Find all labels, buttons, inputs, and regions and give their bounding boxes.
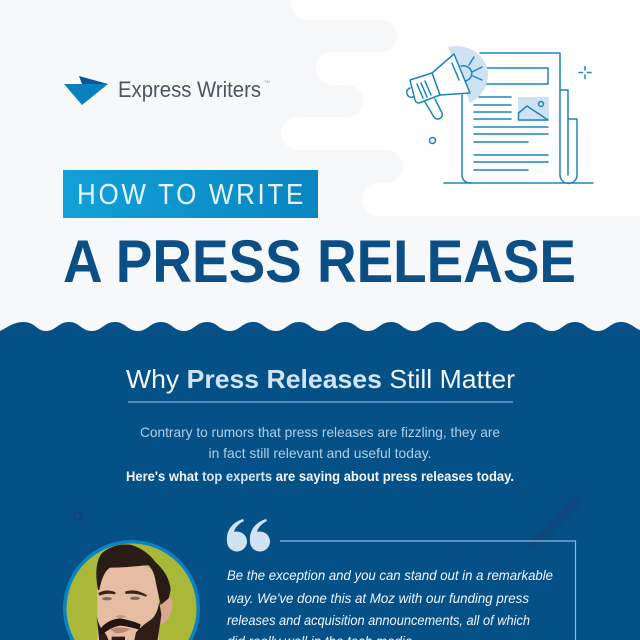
beard <box>97 602 161 640</box>
logo: Express Writers <box>64 76 270 105</box>
quote text <box>227 567 553 640</box>
decorative gear icon <box>74 512 81 520</box>
quote frame <box>280 541 576 640</box>
newspaper page <box>462 53 560 183</box>
ear <box>159 597 172 624</box>
blue panel with wave edge <box>0 322 640 640</box>
nose shadow <box>115 615 127 618</box>
logo wordmark: Express Writers <box>118 77 261 102</box>
face <box>97 563 159 640</box>
title: A PRESS RELEASE <box>63 228 576 295</box>
image thumbnail <box>518 97 549 121</box>
small circle <box>430 138 436 144</box>
intro text: Contrary to rumors that press releases are fizzling, they are <box>140 424 500 440</box>
decorative pencil icon <box>527 496 581 549</box>
quote text: way. We've done this at Moz with our funding press <box>227 590 529 606</box>
newspaper folds <box>560 90 577 184</box>
megaphone <box>407 46 488 119</box>
quote text: Be the exception and you can stand out in a remarkable <box>227 567 553 583</box>
quote text: releases and acquisition announcements, all of which <box>227 612 530 628</box>
sparkle <box>579 66 591 78</box>
subtitle box: HOW TO WRITE <box>77 179 306 211</box>
portrait photo <box>63 540 200 640</box>
intro text: in fact still relevant and useful today. <box>208 445 432 461</box>
baseline <box>444 182 593 184</box>
section heading: Why Press Releases Still Matter <box>126 364 515 394</box>
subtitle box <box>63 170 318 218</box>
icon: logo arrow <box>64 76 108 105</box>
headline box <box>486 68 548 84</box>
intro text <box>126 424 514 484</box>
text lines <box>474 97 548 170</box>
eyebrows <box>98 590 147 597</box>
header background with cloud shape <box>0 0 640 340</box>
lip <box>110 627 130 633</box>
eyes <box>102 597 112 600</box>
hair <box>96 544 171 605</box>
moustache <box>99 618 141 635</box>
intro text: Here's what top experts are saying about press releases today. <box>126 468 514 484</box>
quote marks <box>227 519 270 552</box>
trademark: TM <box>264 79 270 84</box>
illustration: newspaper and megaphone <box>407 46 593 183</box>
